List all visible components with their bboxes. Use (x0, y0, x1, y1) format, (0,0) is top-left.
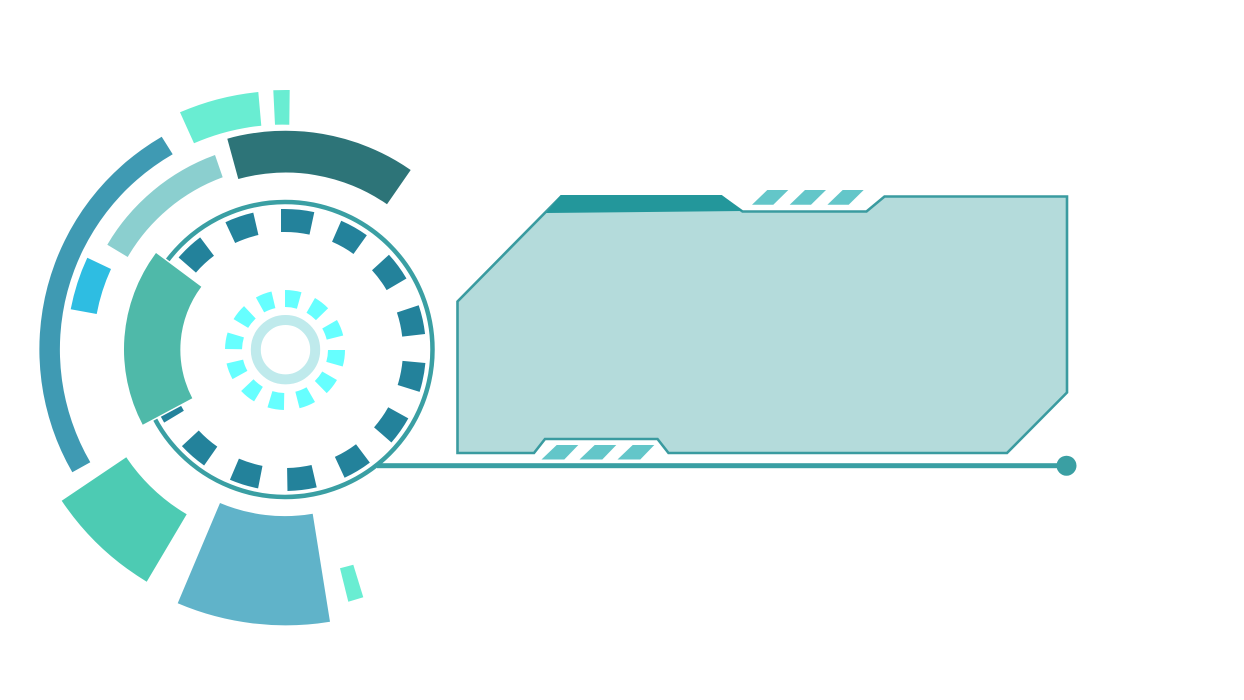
centre ring (256, 320, 315, 379)
light teal arc (107, 155, 223, 257)
mint small bottom tick (340, 565, 363, 602)
bright blue segment (71, 258, 111, 314)
panel: text frame (458, 190, 1067, 460)
cyan centre ticks (225, 290, 345, 410)
connector line with end dot (377, 456, 1076, 476)
mint small top tick (273, 90, 290, 125)
top stripes (752, 190, 864, 205)
mint top arc (180, 92, 261, 143)
outer blue arc (39, 137, 173, 472)
panel header tab (546, 195, 743, 213)
radial graphic (39, 90, 433, 625)
bottom blue segment (178, 503, 330, 625)
dark teal arc (227, 131, 411, 204)
bottom-left green segment (62, 457, 187, 582)
bottom stripes (542, 445, 654, 460)
thin circle ring (138, 202, 432, 497)
dark tick ring (149, 209, 428, 494)
green inner segment (124, 253, 201, 425)
panel outline and fill (458, 196, 1067, 453)
